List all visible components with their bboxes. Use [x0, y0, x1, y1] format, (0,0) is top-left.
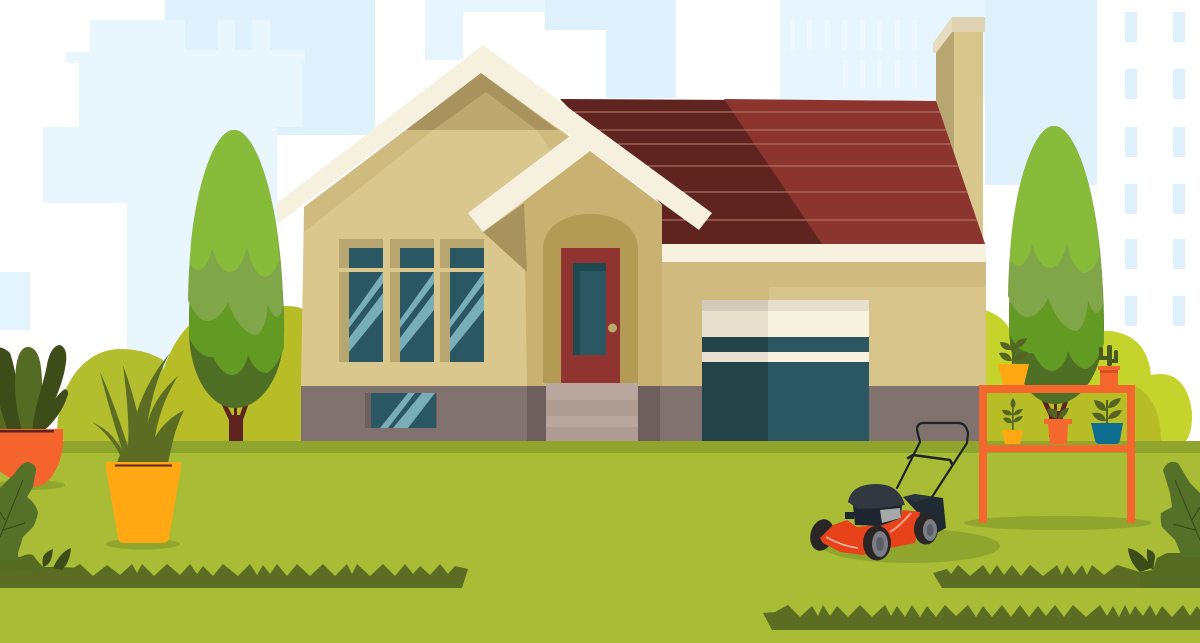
lawn	[0, 441, 1200, 643]
tree left	[188, 130, 284, 441]
rear housing	[903, 494, 946, 535]
bush: bottom right	[1128, 462, 1200, 588]
leaf	[1161, 462, 1200, 557]
porch gable	[483, 151, 662, 386]
plant: top right cactus	[1098, 345, 1120, 385]
leaves	[0, 403, 14, 432]
potted plant shelf	[964, 338, 1152, 530]
small leaves	[1128, 548, 1155, 572]
plant: lower middle orange pot	[1044, 408, 1072, 444]
bush: bottom left	[0, 462, 80, 588]
tree right	[1008, 126, 1104, 437]
main gable wall	[301, 73, 620, 441]
shelf shadow	[964, 516, 1152, 530]
windows	[339, 239, 484, 362]
spiky leaves	[92, 353, 184, 467]
leaf	[0, 462, 38, 560]
mower shadow	[822, 529, 1000, 563]
window glare	[349, 272, 484, 352]
foliage	[1009, 126, 1104, 404]
trunk	[221, 403, 249, 441]
bushes behind the house, right	[985, 310, 1192, 441]
basement window	[365, 393, 437, 428]
roof	[560, 99, 990, 244]
trunk	[1041, 399, 1069, 437]
hedge: bottom	[763, 605, 1200, 630]
base	[1140, 553, 1200, 588]
hedge: right upper	[933, 565, 1200, 588]
rear wheel left	[807, 517, 837, 553]
bowl	[0, 429, 63, 486]
gable trim	[277, 45, 712, 232]
engine	[845, 484, 905, 526]
front door	[561, 248, 620, 383]
bushes behind the house, left	[57, 306, 303, 441]
front steps	[546, 383, 638, 441]
front wheel	[863, 526, 891, 560]
shingle lines	[560, 112, 990, 220]
hedge: left	[0, 564, 468, 588]
small leaves	[42, 548, 71, 570]
handle	[897, 423, 968, 497]
porch arch	[543, 214, 638, 383]
plant: lower left small pot	[1002, 398, 1023, 444]
shelf frame	[979, 385, 1135, 523]
foliage	[189, 130, 284, 408]
chimney	[933, 17, 985, 237]
side wheel	[914, 514, 938, 544]
pot	[106, 462, 181, 543]
plant: top left yellow pot	[998, 338, 1029, 385]
garage wing wall	[638, 244, 986, 441]
background city skyline	[0, 0, 1185, 440]
base	[0, 554, 80, 588]
garage door	[702, 300, 869, 441]
red deck	[820, 510, 920, 555]
plant: lower right blue pot	[1091, 398, 1123, 444]
lawn mower	[807, 423, 1000, 563]
potted plant: large orange bowl	[0, 345, 68, 490]
potted plant: yellow pot	[92, 353, 184, 550]
